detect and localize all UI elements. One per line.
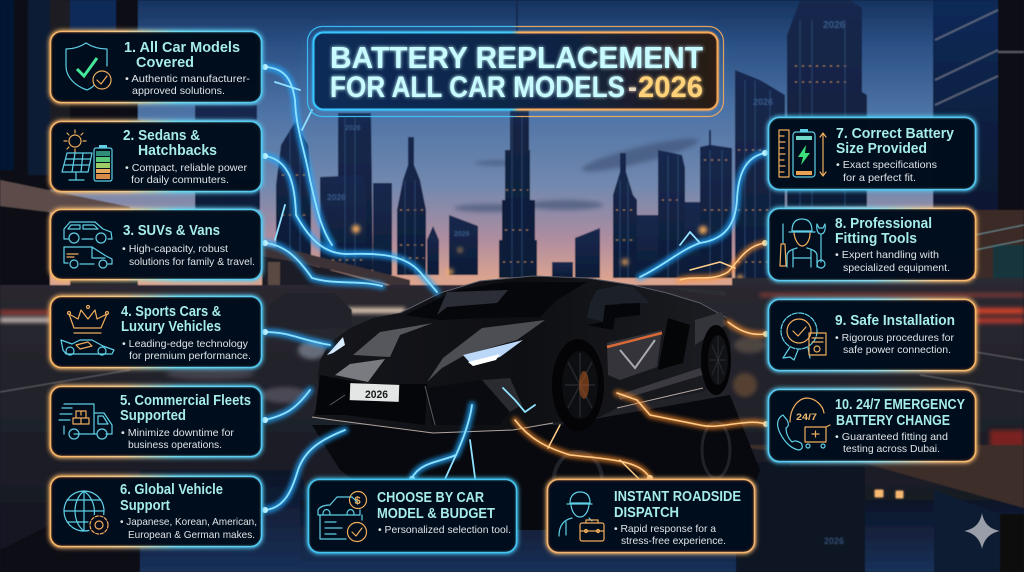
tower 2026 labels [327, 20, 846, 238]
panel 5: commercial fleets supported [50, 386, 262, 456]
panel 6: global vehicle support: 6. Global Vehicle [120, 482, 223, 498]
icon: rosette and certificate [781, 313, 826, 360]
icon: crown and sports car [61, 306, 114, 355]
panel 8: professional fitting tools: specialized equipment. [843, 262, 950, 274]
panel 4: sports cars and luxury vehicles: for premium performance. [129, 350, 251, 362]
car reflection [312, 395, 760, 530]
panel: instant roadside dispatch [548, 480, 754, 552]
spoiler [667, 287, 726, 296]
background: dusk city scene: 2026 [824, 536, 844, 546]
icon: car form, dollar, check: $ [354, 495, 361, 507]
left building [0, 0, 140, 190]
panel 7: correct battery size provided: Size Provided [836, 141, 927, 157]
overpass left [0, 180, 130, 222]
tower 2026 labels: 2026 [454, 231, 470, 238]
license plate: 2026 [365, 389, 388, 401]
tower 2026 labels: 2026 [753, 97, 773, 107]
title text [330, 40, 703, 104]
orange core [515, 243, 766, 490]
panel 2: sedans and hatchbacks: • Compact, reliable power [125, 162, 248, 174]
icon: delivery truck [59, 404, 112, 439]
title text: 2026 [638, 71, 703, 104]
orange glow [515, 243, 766, 478]
panel: instant roadside dispatch: DISPATCH [614, 505, 679, 521]
panel 7: correct battery size provided [768, 118, 976, 190]
panel 1: all car models covered: 1. All Car Models [124, 40, 240, 56]
road surface [0, 285, 1024, 572]
panel 4: sports cars and luxury vehicles: • Leading-edge technology [122, 338, 249, 350]
icon: shield with checks [66, 43, 111, 90]
panel 6: global vehicle support: • Japanese, Korean, American, [120, 516, 257, 528]
panel: choose by car model and budget [308, 480, 516, 552]
panel 5: commercial fleets supported: Supported [120, 408, 186, 424]
horizon lights [352, 225, 743, 281]
panel 7: correct battery size provided: for a perfect fit. [843, 172, 916, 184]
icon: ruler, battery, height arrow [779, 129, 826, 177]
panel 9: safe installation: • Rigorous procedures for [835, 332, 955, 344]
panel 2: sedans and hatchbacks: Hatchbacks [138, 143, 217, 159]
panel 5: commercial fleets supported: 5. Commercial Fleets [120, 393, 251, 409]
panel: instant roadside dispatch: stress-free experience. [621, 535, 726, 547]
panel 3: suvs and vans: 3. SUVs & Vans [123, 223, 220, 239]
icon: operator with briefcase [559, 492, 604, 541]
panel 5: commercial fleets supported: business operations. [128, 439, 222, 451]
panel 8: professional fitting tools: 8. Professional [835, 216, 932, 232]
panel 10: 24/7 emergency battery change: 10. 24/7 EMERGENCY [835, 397, 965, 413]
lightning and connector lines [262, 64, 769, 530]
water reflection areas [0, 480, 140, 572]
panel: choose by car model and budget: CHOOSE BY CAR [377, 490, 484, 506]
panel 10: 24/7 emergency battery change: • Guaranteed fitting and [835, 431, 948, 443]
panel 7: correct battery size provided: 7. Correct Battery [836, 126, 954, 142]
title panel [308, 26, 724, 116]
panel 2: sedans and hatchbacks: 2. Sedans & [123, 128, 200, 144]
right buildings [933, 0, 1024, 212]
panel 1: all car models covered: approved solutions. [132, 85, 225, 97]
panel: instant roadside dispatch: INSTANT ROADSIDE [614, 489, 741, 505]
panel 10: 24/7 emergency battery change [768, 390, 976, 462]
light streaks [0, 294, 1024, 448]
title text: FOR ALL CAR MODELS [330, 71, 625, 104]
panel 5: commercial fleets supported: • Minimize downtime for [121, 427, 235, 439]
tower 2026 labels: 2026 [823, 20, 846, 31]
panel 1: all car models covered [50, 32, 262, 102]
panel 3: suvs and vans: solutions for family & travel. [129, 256, 255, 268]
hood stripes [353, 323, 433, 357]
panel 4: sports cars and luxury vehicles: 4. Sports Cars & [121, 304, 221, 320]
panel 1: all car models covered: Covered [136, 55, 194, 71]
panel: choose by car model and budget: • Personalized selection tool. [378, 524, 511, 536]
panel: instant roadside dispatch: • Rapid response for a [614, 523, 716, 535]
windows [405, 282, 587, 320]
lower bumper [315, 375, 427, 425]
blue glow [265, 67, 765, 510]
connector nodes [262, 64, 768, 513]
wheels [552, 339, 604, 431]
tower 2026 labels: 2026 [327, 192, 346, 202]
tower windows [282, 66, 850, 262]
panel 8: professional fitting tools: Fitting Tools [835, 231, 917, 247]
oncoming car [268, 293, 352, 330]
license plate [350, 383, 399, 402]
panel 2: sedans and hatchbacks: for daily commuters. [131, 174, 229, 186]
panel 6: global vehicle support: Support [120, 498, 170, 514]
panel 10: 24/7 emergency battery change: testing across Dubai. [843, 443, 940, 455]
panel 8: professional fitting tools [768, 208, 976, 280]
sports car [312, 276, 760, 530]
panel 3: suvs and vans [50, 210, 262, 280]
panel 2: sedans and hatchbacks [50, 122, 262, 192]
panel 1: all car models covered: • Authentic manufacturer- [125, 73, 251, 85]
clouds [454, 133, 700, 212]
icon: suv and van [64, 222, 112, 268]
icon: car form, dollar, check [318, 492, 366, 542]
skyline towers [195, 0, 867, 290]
panel 9: safe installation: 9. Safe Installation [835, 313, 955, 329]
panel 9: safe installation: safe power connection. [843, 344, 951, 356]
icon: sun, solar panel, battery [62, 130, 112, 181]
panel 3: suvs and vans: • High-capacity, robust [122, 243, 228, 255]
panel: choose by car model and budget: MODEL & BUDGET [377, 506, 495, 522]
panel 6: global vehicle support: European & German makes. [128, 529, 255, 541]
panel 6: global vehicle support [50, 476, 262, 546]
icon: sparkle watermark [964, 513, 1000, 549]
headlights [463, 340, 523, 366]
panel 4: sports cars and luxury vehicles [50, 296, 262, 368]
panel 7: correct battery size provided: • Exact specifications [836, 159, 937, 171]
icon: phone, 24/7 dial, battery cart [778, 398, 830, 450]
car body [312, 276, 731, 433]
door graphic and side intake [607, 330, 662, 380]
icon: globe and gear [64, 491, 110, 536]
tower 2026 labels: 2026 [345, 125, 361, 132]
panel 8: professional fitting tools: • Expert handling with [835, 249, 939, 261]
title text: BATTERY REPLACEMENT [330, 40, 703, 75]
icon: phone, 24/7 dial, battery cart: 24/7 [796, 412, 817, 423]
icon: technician and tools [780, 219, 825, 268]
panel 4: sports cars and luxury vehicles: Luxury Vehicles [121, 319, 221, 335]
panel 10: 24/7 emergency battery change: BATTERY CHANGE [836, 413, 950, 429]
title text: - [628, 71, 637, 104]
blue core [265, 67, 765, 530]
panel 9: safe installation [768, 300, 976, 370]
